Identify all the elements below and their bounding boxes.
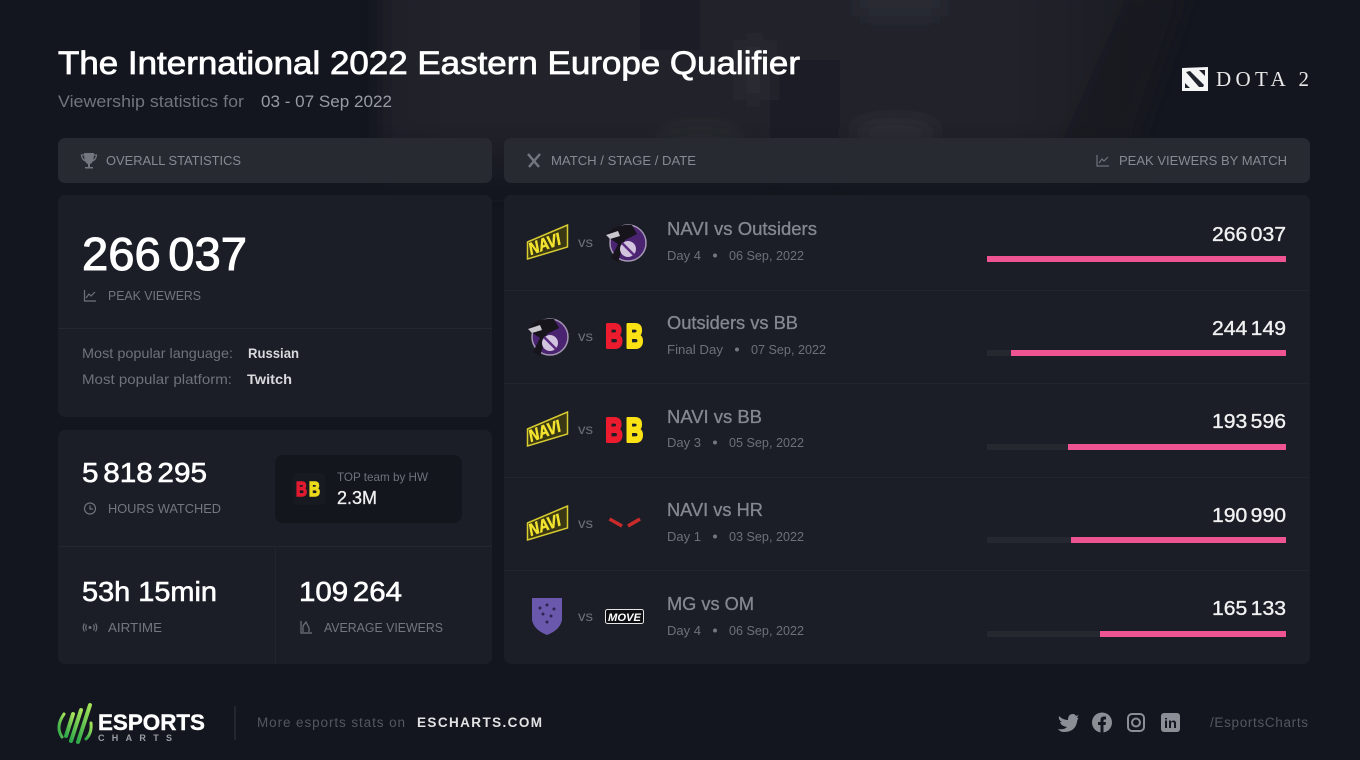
bar: 244 149 <box>987 350 1286 356</box>
icons: social media <box>1058 712 1180 733</box>
logo: NAVI: NAVI <box>526 229 564 259</box>
icon: crossed swords <box>528 154 540 167</box>
row: MG vs OM: Day 4 <box>667 623 701 638</box>
logo: Esports Charts <box>59 705 205 743</box>
text: most popular platform: Twitch <box>247 371 292 387</box>
icon: Esports Charts mark <box>59 705 91 742</box>
row: NAVI vs Outsiders: NAVI vs Outsiders <box>667 219 817 239</box>
panel: match header: MATCH / STAGE / DATE <box>551 153 696 168</box>
stat: hours watched: HOURS WATCHED <box>108 501 221 516</box>
panel: peak viewers by match <box>504 195 1310 664</box>
bar: 193 596 <box>987 444 1286 450</box>
row: MG vs OM: vs <box>578 608 593 624</box>
row: NAVI vs HR: vs <box>578 515 593 531</box>
logo: NAVI: NAVI <box>526 416 564 446</box>
row: NAVI vs Outsiders: Day 4 <box>667 248 701 263</box>
icon: facebook <box>1092 712 1112 733</box>
stat: hours watched <box>82 457 221 516</box>
logo: MOVE: MOVE <box>608 612 642 624</box>
title: The International 2022 Eastern Europe Qualifier <box>58 45 800 81</box>
row: NAVI vs Outsiders: 06 Sep, 2022 <box>729 248 804 263</box>
footer: social handle: /EsportsCharts <box>1210 715 1308 730</box>
panel: match header <box>504 138 1310 183</box>
text: most popular language: Most popular language: <box>82 345 233 361</box>
bar: 165 133 <box>987 631 1286 637</box>
callout: top team by hours watched: B <box>296 479 307 501</box>
stat: average viewers <box>299 576 443 635</box>
subtitle: date range <box>58 92 392 111</box>
panel: hours watched, airtime, average viewers <box>58 430 492 664</box>
logo: Outsiders <box>606 225 646 262</box>
row: NAVI vs BB: 193 596 <box>1212 411 1286 433</box>
icon: twitter <box>1058 714 1078 732</box>
logo: BB: B <box>606 412 622 448</box>
callout: top team by hours watched: TOP team by HW <box>337 470 429 484</box>
stat: airtime <box>82 576 217 635</box>
icon: instagram <box>1128 714 1144 731</box>
panel: peak viewers <box>58 195 492 417</box>
row: MG vs OM: MG vs OM <box>667 594 754 614</box>
text: most popular platform <box>82 371 292 387</box>
text: most popular language: Russian <box>248 345 299 361</box>
logo: BB <box>606 412 643 448</box>
row: NAVI vs Outsiders: 266 037 <box>1212 224 1286 246</box>
subtitle: date range: Viewership statistics for <box>58 92 244 111</box>
callout: top team by hours watched <box>275 455 462 523</box>
row: Outsiders vs BB: Final Day <box>667 342 723 357</box>
logo: NAVI: NAVI <box>526 510 564 540</box>
logo: BB: B <box>606 318 622 354</box>
logo: BB: B <box>626 412 643 448</box>
row: Outsiders vs BB: 07 Sep, 2022 <box>751 342 826 357</box>
row: Outsiders vs BB <box>528 313 1286 357</box>
subtitle: date range: 03 - 07 Sep 2022 <box>261 92 392 111</box>
row: NAVI vs BB: 05 Sep, 2022 <box>729 435 804 450</box>
label: peak viewers: PEAK VIEWERS <box>108 288 201 303</box>
panel: match header: PEAK VIEWERS BY MATCH <box>1119 153 1287 168</box>
row: MG vs OM: 06 Sep, 2022 <box>729 623 804 638</box>
row: NAVI vs BB: Day 3 <box>667 435 701 450</box>
row: NAVI vs HR: Day 1 <box>667 529 701 544</box>
logo: BB: B <box>626 318 643 354</box>
row: MG vs OM <box>532 594 1286 638</box>
callout: top team by hours watched: 2.3M <box>337 488 377 508</box>
row: NAVI vs BB <box>526 407 1286 450</box>
row: NAVI vs BB: NAVI vs BB <box>667 407 762 427</box>
logo: MG shield <box>532 598 562 635</box>
row: NAVI vs HR: 190 990 <box>1212 505 1286 527</box>
bar: 190 990 <box>987 537 1286 543</box>
stat: hours watched: 5 818 295 <box>82 457 207 488</box>
row: NAVI vs Outsiders <box>526 219 1286 263</box>
row: Outsiders vs BB: 244 149 <box>1212 318 1286 340</box>
stat: peak viewers value: 266 037 <box>82 228 247 280</box>
row: Outsiders vs BB: Outsiders vs BB <box>667 313 798 333</box>
footer: more esports stats: More esports stats on <box>257 715 405 730</box>
row: NAVI vs Outsiders: vs <box>578 234 593 250</box>
footer: more esports stats <box>257 715 542 730</box>
panel: overall statistics header <box>58 138 492 183</box>
text: most popular platform: Most popular platform: <box>82 371 232 387</box>
icon: trophy <box>82 153 96 168</box>
text: most popular language <box>82 345 299 361</box>
stat: average viewers: 109 264 <box>299 576 402 607</box>
row: NAVI vs HR <box>526 500 1286 544</box>
icon: peak chart <box>1097 155 1109 166</box>
logo: Dota 2: DOTA 2 <box>1216 67 1309 91</box>
row: MG vs OM: 165 133 <box>1212 598 1286 620</box>
row: NAVI vs BB: vs <box>578 421 593 437</box>
logo: Esports Charts: CHARTS <box>98 733 172 743</box>
stat: airtime: AIRTIME <box>108 620 162 635</box>
logo: BB <box>606 318 643 354</box>
panel: overall statistics header: OVERALL STATISTICS <box>106 153 241 168</box>
stat: airtime: 53h 15min <box>82 576 217 607</box>
icon: linkedin: in <box>1164 715 1177 731</box>
row: Outsiders vs BB: vs <box>578 328 593 344</box>
row: NAVI vs HR: NAVI vs HR <box>667 500 763 520</box>
row: NAVI vs HR: 03 Sep, 2022 <box>729 529 804 544</box>
logo: Esports Charts: ESPORTS <box>98 710 205 735</box>
callout: top team by hours watched: B <box>309 479 320 501</box>
stat: average viewers: AVERAGE VIEWERS <box>324 620 443 635</box>
bar: 266 037 <box>987 256 1286 262</box>
logo: Outsiders <box>528 319 568 356</box>
footer: more esports stats: ESCHARTS.COM <box>417 715 542 730</box>
icon: peak chart small <box>84 290 96 301</box>
logo: HR <box>610 519 640 526</box>
